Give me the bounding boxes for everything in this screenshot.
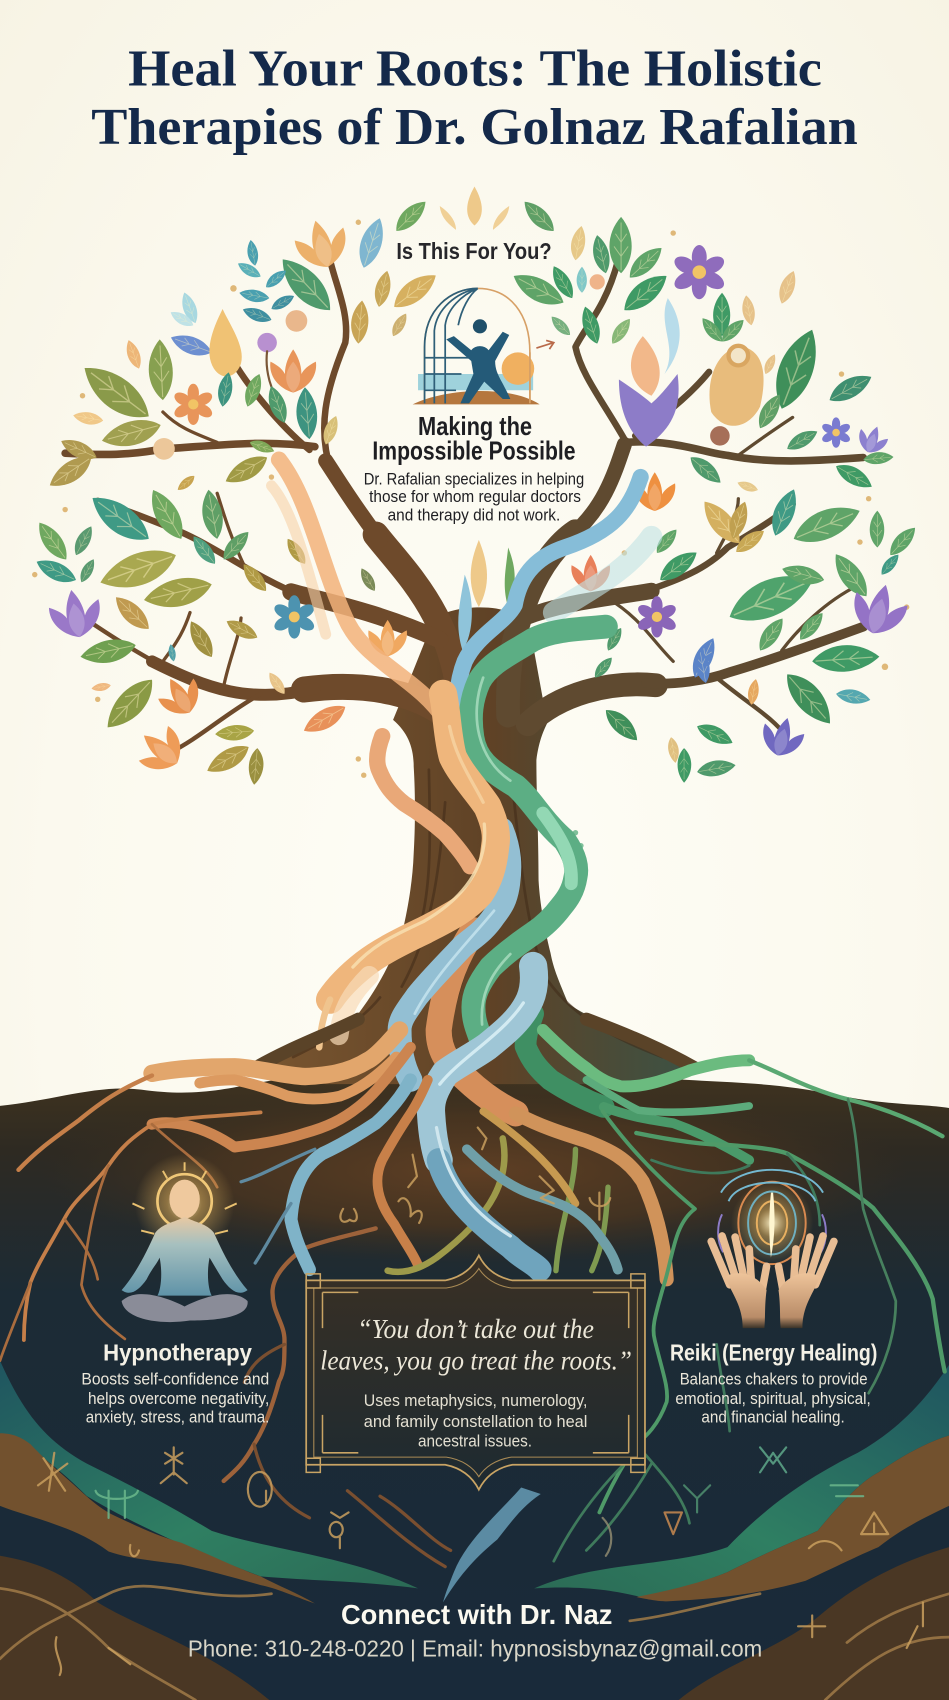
- icon: energy hands: [711, 1170, 834, 1328]
- title: Therapies of Dr. Golnaz Rafalian: [91, 99, 858, 156]
- ribbon: orange second strand: [377, 736, 470, 866]
- trunk: [253, 607, 691, 1084]
- heading: is this for you: Is This For You?: [396, 238, 552, 264]
- title: [91, 41, 858, 156]
- tree trunk and branches: [65, 260, 863, 1084]
- roots: gold centre: [388, 1111, 667, 1279]
- heading: making the impossible possible: Impossible Possible: [372, 436, 575, 466]
- text: specialization: [364, 470, 584, 524]
- foliage: crown top: [272, 186, 727, 347]
- energy ribbons: [271, 460, 651, 1160]
- text: quote body: Uses metaphysics, numerology,: [364, 1391, 587, 1410]
- band: right brown: [636, 1435, 949, 1601]
- root: lower blue stream: [443, 1488, 541, 1602]
- foliage: lower right: [571, 472, 920, 783]
- text: hypnotherapy body: anxiety, stress, and trauma.: [86, 1408, 269, 1426]
- quote text: [320, 1314, 632, 1375]
- text: reiki body: [675, 1371, 871, 1426]
- centre flames: [458, 540, 515, 651]
- quote text: leaves, you go treat the roots.”: [320, 1345, 632, 1375]
- roots: blue: [241, 1080, 618, 1270]
- foliage: upper right: [619, 269, 894, 494]
- band: left brown: [0, 1433, 315, 1604]
- panel: hypnotherapy: [81, 1154, 269, 1426]
- ribbon: green lower: [526, 1014, 604, 1107]
- title: Heal Your Roots: The Holistic: [128, 41, 822, 98]
- ribbon: peach main strand: [319, 694, 496, 1047]
- quote text: “You don’t take out the: [357, 1314, 594, 1344]
- icon: figure escaping cage: [413, 288, 554, 404]
- text: specialization: Dr. Rafalian specializes in helping: [364, 470, 584, 489]
- text: quote body: ancestral issues.: [418, 1431, 532, 1450]
- ribbon: blue canopy: [456, 477, 651, 748]
- ribbon: orange canopy: [271, 460, 445, 720]
- text: contact details: Phone: 310-248-0220 | Email: hypnosisbynaz@gmail.com: [188, 1636, 762, 1662]
- panel: reiki: [670, 1170, 877, 1426]
- roots: lower fine lines: [0, 1586, 949, 1700]
- text: hypnotherapy body: [81, 1371, 269, 1426]
- heading: hypnotherapy: Hypnotherapy: [103, 1340, 252, 1366]
- text: hypnotherapy body: Boosts self-confidence and: [81, 1371, 269, 1388]
- heading: making the impossible possible: [372, 411, 575, 466]
- rune symbols: [38, 1128, 923, 1675]
- band: lower left corner: [0, 1556, 269, 1700]
- ribbon: green canopy and trunk: [471, 627, 606, 1040]
- text: reiki body: emotional, spiritual, physical,: [675, 1390, 871, 1408]
- panel: is this for you: [364, 238, 584, 524]
- branches: right: [508, 261, 863, 737]
- roots: green right: [543, 1030, 945, 1561]
- text: quote body: and family constellation to heal: [364, 1412, 587, 1431]
- text: quote body: [364, 1391, 587, 1450]
- text: specialization: those for whom regular doctors: [369, 487, 581, 506]
- roots: [0, 1019, 949, 1700]
- icon: meditating figure: [122, 1154, 248, 1322]
- text: hypnotherapy body: helps overcome negativity,: [88, 1390, 269, 1408]
- canopy dots: [32, 220, 909, 848]
- panel: quote: [306, 1255, 645, 1490]
- heading: making the impossible possible: Making the: [418, 411, 532, 441]
- text: reiki body: Balances chakers to provide: [680, 1371, 868, 1388]
- heading: connect: Connect with Dr. Naz: [341, 1598, 612, 1630]
- ribbon: blue trunk: [400, 829, 509, 1080]
- text: specialization: and therapy did not work.: [388, 505, 560, 524]
- lower root bands: [0, 1361, 949, 1700]
- band: left teal: [0, 1361, 418, 1588]
- underground panel: [0, 1076, 949, 1700]
- band: lower right corner: [679, 1547, 949, 1700]
- heading: reiki: Reiki (Energy Healing): [670, 1340, 877, 1366]
- ribbon: blue front strand: [431, 966, 534, 1160]
- ribbon: orange lower: [439, 930, 516, 1113]
- foliage: lower left: [32, 485, 407, 785]
- ornate frame: [306, 1255, 645, 1490]
- roots: dark base: [255, 1019, 695, 1068]
- band: right teal: [534, 1365, 949, 1597]
- text: reiki body: and financial healing.: [701, 1408, 845, 1426]
- branches: left: [65, 260, 461, 754]
- foliage: upper left: [45, 239, 341, 494]
- contact footer: [188, 1598, 762, 1662]
- roots: orange left: [0, 1030, 451, 1567]
